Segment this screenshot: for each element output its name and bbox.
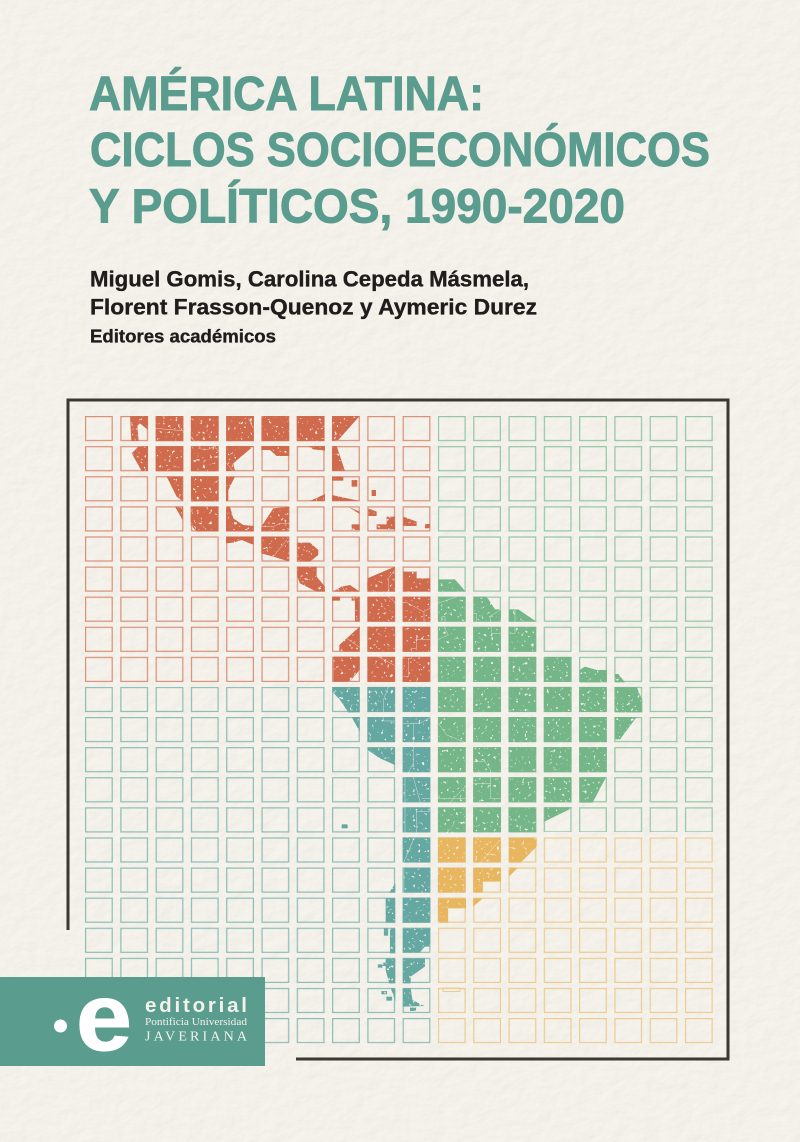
logo wordmark: JAVERIANA — [145, 1030, 248, 1044]
logo wordmark: Pontificia Universidad — [145, 1017, 248, 1028]
title — [89, 67, 710, 234]
map: Andes and Southern Cone west (teal) — [332, 687, 438, 1011]
logo panel — [0, 977, 265, 1066]
authors: Florent Frasson-Quenoz y Aymeric Durez — [90, 294, 537, 319]
map: Southern Cone east (orange) — [438, 837, 537, 923]
map: Mexico, Central America and north Andes (red) — [130, 416, 438, 687]
logo wordmark: editorial — [145, 994, 247, 1017]
map: country borders — [155, 418, 515, 893]
grid: red quadrant — [85, 416, 432, 682]
logo mark — [54, 964, 132, 1071]
map: Brazil and north-east South America (green) — [438, 579, 642, 837]
frame — [68, 400, 728, 1059]
map of Latin America — [130, 416, 642, 1011]
logo mark: e — [76, 964, 132, 1071]
publisher logo — [0, 964, 265, 1071]
authors: Miguel Gomis, Carolina Cepeda Másmela, — [90, 266, 529, 292]
authors — [90, 266, 537, 347]
title: AMÉRICA LATINA: — [89, 67, 484, 121]
grid: teal quadrant — [85, 687, 432, 1043]
grid: green quadrant — [438, 416, 713, 832]
small outlined mark — [443, 988, 460, 992]
title: CICLOS SOCIOECONÓMICOS — [90, 122, 710, 177]
logo wordmark — [145, 994, 248, 1044]
title: Y POLÍTICOS, 1990-2020 — [89, 180, 625, 234]
grid: orange quadrant — [438, 837, 713, 1043]
authors: Editores académicos — [90, 327, 276, 347]
